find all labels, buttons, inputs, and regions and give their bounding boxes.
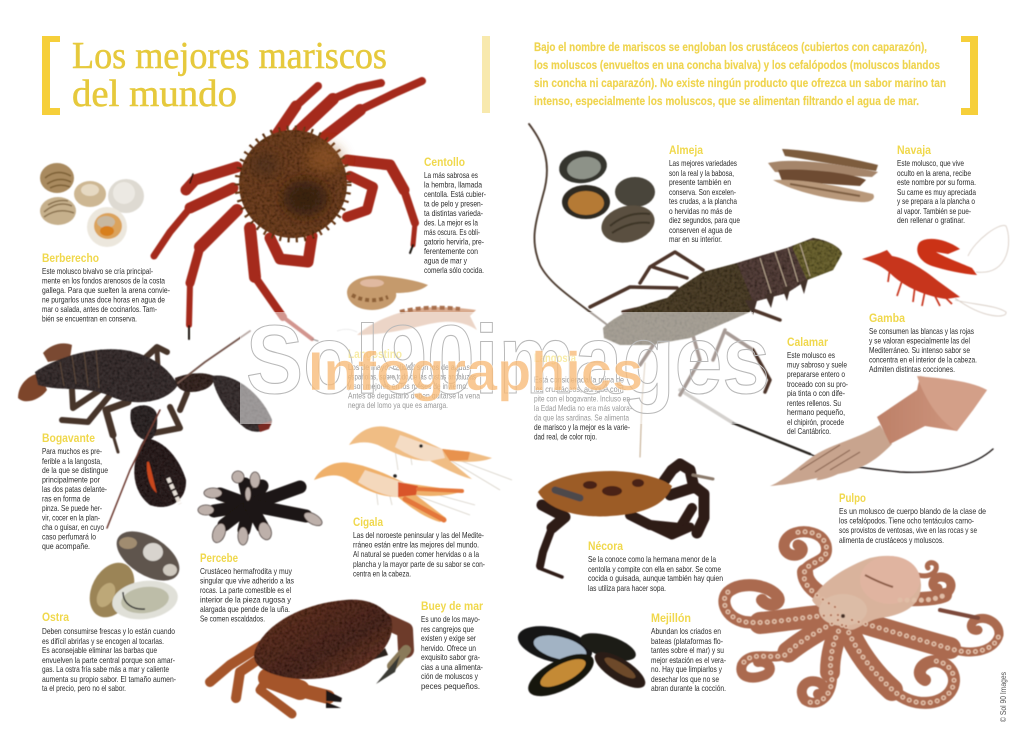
panel: Mejillón <box>514 611 726 705</box>
panel: Langostino <box>337 276 480 410</box>
text block: Navaja: oculto en la arena, recibe <box>897 168 971 178</box>
text block: Langosta: da que las sardinas. Se alimenta <box>534 412 629 422</box>
heading: Navaja: Navaja <box>897 143 931 157</box>
text block: Cigala: Las del noroeste peninsular y las del Medite- <box>353 530 484 540</box>
text block: Bogavante: vir, cocer en la plan- <box>42 512 100 522</box>
heading: Buey de mar: Buey de mar <box>421 599 483 613</box>
text block: Langosta: Está considerada la reina de <box>534 374 624 384</box>
text block: Berberecho: mar o salada, antes de cocinarlos. Tam- <box>42 304 157 314</box>
heading: Centollo: Centollo <box>424 155 465 169</box>
heading: Ostra: Ostra <box>42 610 69 624</box>
text block: Ostra: ta el precio, pero no el sabor. <box>42 683 126 693</box>
text block: Berberecho: ne purgarlos unas doce horas en agua de <box>42 294 165 304</box>
text block: Buey de mar: ción de moluscos y <box>421 671 479 681</box>
heading: Cigala: Cigala <box>353 515 383 529</box>
watermark: Infographics: Infographics <box>308 340 643 402</box>
heading: Berberecho: Berberecho <box>42 251 99 265</box>
text block: Percebe: interior de la pieza rugosa y <box>200 594 292 604</box>
text block: Bogavante: caso perfumará lo <box>42 532 96 542</box>
heading: Gamba: Gamba <box>869 311 905 325</box>
heading: Calamar: Calamar <box>787 335 828 349</box>
text block: Navaja: den rellenar o gratinar. <box>897 215 965 225</box>
text block: Buey de mar: Es uno de los mayo- <box>421 614 480 624</box>
text block: Navaja: Su carne es muy apreciada <box>897 187 976 197</box>
text block: Bogavante: de la que se distingue <box>42 465 108 475</box>
text block: Pulpo <box>839 506 986 545</box>
heading: Langosta: Langosta <box>534 351 576 365</box>
text block: Langosta: de marisco y la mejor es la varie- <box>534 422 630 432</box>
text block: Almeja: presente también en <box>669 177 731 187</box>
text block: Bogavante: pinza. Se puede her- <box>42 503 102 513</box>
text block: Buey de mar: peces pequeños. <box>421 681 480 691</box>
text block: Nécora: centolla y compite con ella en sabor. Se come <box>588 564 721 574</box>
text block: Gamba: Mediterráneo. Su intenso sabor se <box>869 345 970 355</box>
text block: Calamar: muy sabroso y suele <box>787 360 847 370</box>
text block: Ostra: es difícil abrirlas y se encogen al tocarlas. <box>42 636 164 646</box>
text block: Calamar: Este molusco es <box>787 350 835 360</box>
text block: Centollo: comerla sólo cocida. <box>424 265 484 275</box>
text block: Buey de mar: cias a una alimenta- <box>421 662 483 672</box>
panel: Centollo <box>154 81 486 341</box>
text block: Percebe: singular que vive adherido a las <box>200 576 294 586</box>
text block: Calamar: troceado con su pro- <box>787 379 848 389</box>
icon: velvet crab <box>538 464 713 577</box>
text block: Langosta: la Edad Media no era más valora- <box>534 403 632 413</box>
text block: Cigala: centra en la cabeza. <box>353 568 411 578</box>
right bracket <box>961 36 978 115</box>
text block: Langostino: españolas, sobre todo de las costas andaluzas <box>348 372 476 382</box>
text block: Mejillón <box>651 626 726 693</box>
text block: Mejillón: mejor estación es el vera- <box>651 655 726 665</box>
text block: Buey de mar: exquisito sabor gra- <box>421 652 480 662</box>
text block: Langostino: y son mejores en los meses de invierno. <box>348 381 468 391</box>
text block: Calamar: hermano pequeño, <box>787 407 845 417</box>
text block: Nécora: cocida o guisada, aunque también hay quien <box>588 573 723 583</box>
text block: Bogavante: ferible a la langosta, <box>42 456 102 466</box>
text block: Langostino: Antes de degustarlo deben quitarse la vena <box>348 390 480 400</box>
text block: Nécora <box>588 554 723 593</box>
text block: Percebe: Se comen escaldados. <box>200 614 265 624</box>
text block: Percebe: Crustáceo hermafrodita y muy <box>200 566 293 576</box>
intro text: Bajo el nombre de mariscos se engloban los crustáceos (cubiertos con caparazón), <box>534 41 927 54</box>
panel: Percebe <box>198 471 324 624</box>
text block: Centollo: des. La mejor es la <box>424 218 478 228</box>
panel: Berberecho <box>40 163 170 324</box>
title: del mundo <box>72 73 237 115</box>
heading: Bogavante: Bogavante <box>42 431 95 445</box>
title: Los mejores mariscos <box>72 35 387 77</box>
watermark veil <box>240 312 753 424</box>
text block: Centollo: agua de mar y <box>424 256 468 266</box>
icon: spider crab <box>154 81 422 341</box>
intro text: sin concha ni caparazón). No existe ningún producto que ofrezca un sabor marino tan <box>534 77 946 90</box>
heading: Percebe: Percebe <box>200 551 238 565</box>
icon: goose barnacles <box>198 471 324 545</box>
heading: Nécora: Nécora <box>588 539 623 553</box>
text block: Pulpo: sos provistos de ventosas, vive en las rocas y se <box>839 525 977 535</box>
text block: Langosta: los crustáceos, aunque com- <box>534 384 626 394</box>
text block: Cigala: plancha y la mayor parte de su sabor se con- <box>353 559 485 569</box>
text block: Cigala: rráneo están entre las mejores del mundo. <box>353 540 479 550</box>
watermark: Sol90images: Sol90images <box>246 305 770 414</box>
icon: clams <box>557 148 659 248</box>
panel: Navaja <box>768 143 976 225</box>
icon: red shrimps <box>862 225 1009 316</box>
text block: Percebe: rocas. La parte comestible es el <box>200 585 291 595</box>
text block: Berberecho: Este molusco bivalvo se cría principal- <box>42 266 153 276</box>
text block: Centollo: gatorio hervirla, pre- <box>424 236 484 246</box>
text block: Berberecho: bién se encuentran en conserva. <box>42 314 137 324</box>
text block: Centollo: ferentemente con <box>424 246 478 256</box>
panel: Langosta <box>529 124 993 472</box>
text block: Bogavante: cha o guisar, en cuyo <box>42 522 104 532</box>
icon: cockles <box>40 163 144 247</box>
text block: Ostra: gas. La ostra fría sabe más a mar y caliente <box>42 664 169 674</box>
text block: Gamba: Se consumen las blancas y las rojas <box>869 326 974 336</box>
icon: lobster <box>18 331 272 528</box>
text block: Navaja: y se prepara a la plancha o <box>897 196 975 206</box>
text block: Almeja: son la real y la babosa, <box>669 168 734 178</box>
panel: Almeja <box>557 143 740 248</box>
text block: Centollo: ta de pelo y presen- <box>424 198 483 208</box>
icon: mussels <box>514 619 650 705</box>
text block: Almeja: conserva. Son excelen- <box>669 187 736 197</box>
text block: Ostra: Es aconsejable eliminar las barbas que <box>42 645 157 655</box>
text block: Buey de mar: existen y exige ser <box>421 633 476 643</box>
text block: Percebe: alargada que pende de la uña. <box>200 604 290 614</box>
panel: Ostra <box>42 521 188 693</box>
text block: Centollo: más oscura. Es obli- <box>424 227 480 237</box>
text block: Navaja: al vapor. También se pue- <box>897 206 971 216</box>
text block: Mejillón: tantes sobre el mar) y su <box>651 645 724 655</box>
text block: Langosta: pite con el bogavante. Incluso en <box>534 394 630 404</box>
icon: prawns <box>337 276 477 335</box>
text block: Cigala: Al natural se pueden comer hervidas o a la <box>353 549 479 559</box>
left bracket <box>42 36 60 115</box>
text block: Pulpo: Es un molusco de cuerpo blando de la clase de <box>839 506 986 516</box>
text block: Calamar: prepararse entero o <box>787 369 845 379</box>
text block: Centollo: centolla. Está cubier- <box>424 189 486 199</box>
text block: Bogavante: Para muchos es pre- <box>42 446 102 456</box>
text block: Navaja: Este molusco, que vive <box>897 158 964 168</box>
icon: brown crab <box>210 600 406 714</box>
text block: Langosta <box>534 374 632 442</box>
text block: Gamba <box>869 326 977 374</box>
text block: Centollo: ta distintas varieda- <box>424 208 483 218</box>
panel: Cigala <box>314 426 512 578</box>
text block: Mejillón: no. Hay que limpiarlos y <box>651 664 723 674</box>
text block: Calamar: del Cantábrico. <box>787 426 831 436</box>
text block: Centollo: la hembra, llamada <box>424 180 482 190</box>
text block: Ostra: envuelven la parte central porque son amar- <box>42 655 175 665</box>
text block: Percebe <box>200 566 294 624</box>
text block: Cigala <box>353 530 485 578</box>
intro text: intenso, especialmente los moluscos, que se alimentan filtrando el agua de mar. <box>534 95 919 108</box>
text block: Ostra: Deben consumirse frescas y lo están cuando <box>42 626 175 636</box>
panel: Gamba <box>862 225 1009 374</box>
intro text: los moluscos (envueltos en una concha bivalva) y los cefalópodos (moluscos blandos <box>534 59 940 72</box>
text block: Almeja: tes crudas, a la plancha <box>669 196 737 206</box>
text block: Berberecho: mente en los fondos arenosos de la costa <box>42 276 165 286</box>
icon: spiny lobster <box>529 124 993 472</box>
text block: Bogavante <box>42 446 108 551</box>
text block: Langostino: negra del lomo ya que es amarga. <box>348 400 448 410</box>
intro text <box>534 41 946 108</box>
panel: Nécora <box>538 464 723 593</box>
text block: Calamar: el chipirón, procede <box>787 417 844 427</box>
text block: Calamar: rentes rellenos. Su <box>787 398 841 408</box>
icon: razor clams <box>768 149 878 202</box>
heading: Langostino: Langostino <box>348 347 402 361</box>
text block: Almeja: Las mejores variedades <box>669 158 737 168</box>
title <box>72 35 387 115</box>
text block: Calamar: pia tinta o con dife- <box>787 388 845 398</box>
text block: Bogavante: las dos patas delante- <box>42 484 107 494</box>
text block: Mejillón: Abundan los criados en <box>651 626 721 636</box>
text block: Langosta: dad real, de color rojo. <box>534 432 597 442</box>
icon: oysters <box>81 521 188 625</box>
text block: Buey de mar <box>421 614 483 691</box>
text block: Nécora: Se la conoce como la hermana menor de la <box>588 554 716 564</box>
text block: Buey de mar: res cangrejos que <box>421 624 474 634</box>
text block: Gamba: y se valoran especialmente las del <box>869 336 970 346</box>
text block: Navaja <box>897 158 976 225</box>
panel: Bogavante <box>18 331 272 551</box>
icon: langoustines <box>314 426 512 522</box>
credit: © Sol 90 Images <box>999 672 1008 722</box>
panel: Buey de mar <box>210 599 483 714</box>
centre divider bar <box>482 36 490 113</box>
text block: Pulpo: los cefalópodos. Tiene ocho tentáculos carno- <box>839 516 974 526</box>
icon: octopus <box>724 532 999 703</box>
text block: Mejillón: abran durante la cocción. <box>651 683 726 693</box>
text block: Almeja: mar en su interior. <box>669 234 722 244</box>
text block: Bogavante: que acompañe. <box>42 541 90 551</box>
text block: Almeja: diez segundos, para que <box>669 215 740 225</box>
text block: Nécora: las utiliza para hacer sopa. <box>588 583 666 593</box>
icon: squid <box>770 376 987 486</box>
text block: Berberecho <box>42 266 170 324</box>
panel: Calamar <box>770 335 987 486</box>
text block: Berberecho: gallega. Para que suelten la arena convie- <box>42 285 170 295</box>
text block: Centollo: La más sabrosa es <box>424 170 478 180</box>
text block: Langostino: Los de mayor calidad son los de aguas <box>348 362 470 372</box>
text block: Ostra <box>42 626 176 693</box>
heading: Almeja: Almeja <box>669 143 703 157</box>
text block: Langostino <box>348 362 480 410</box>
heading: Pulpo: Pulpo <box>839 491 866 505</box>
text block: Bogavante: principalmente por <box>42 474 100 484</box>
text block: Calamar <box>787 350 848 436</box>
heading: Mejillón: Mejillón <box>651 611 691 625</box>
text block: Almeja: conserven el agua de <box>669 225 732 235</box>
panel: Pulpo <box>724 491 999 703</box>
text block: Buey de mar: hervido. Ofrece un <box>421 643 476 653</box>
text block: Pulpo: alimenta de crustáceos y moluscos. <box>839 535 944 545</box>
text block: Mejillón: bateas (plataformas flo- <box>651 636 723 646</box>
text block: Almeja <box>669 158 740 244</box>
text block: Gamba: concentra en el interior de la cabeza. <box>869 354 977 364</box>
text block: Gamba: Admiten distintas cocciones. <box>869 364 955 374</box>
text block: Almeja: o hervidas no más de <box>669 206 732 216</box>
text block: Navaja: este nombre por su forma. <box>897 177 976 187</box>
text block: Ostra: aumenta su propio sabor. El tamaño aumen- <box>42 674 176 684</box>
text block: Mejillón: desechar los que no se <box>651 674 719 684</box>
text block: Bogavante: ras en forma de <box>42 494 90 504</box>
text block: Centollo <box>424 170 486 275</box>
